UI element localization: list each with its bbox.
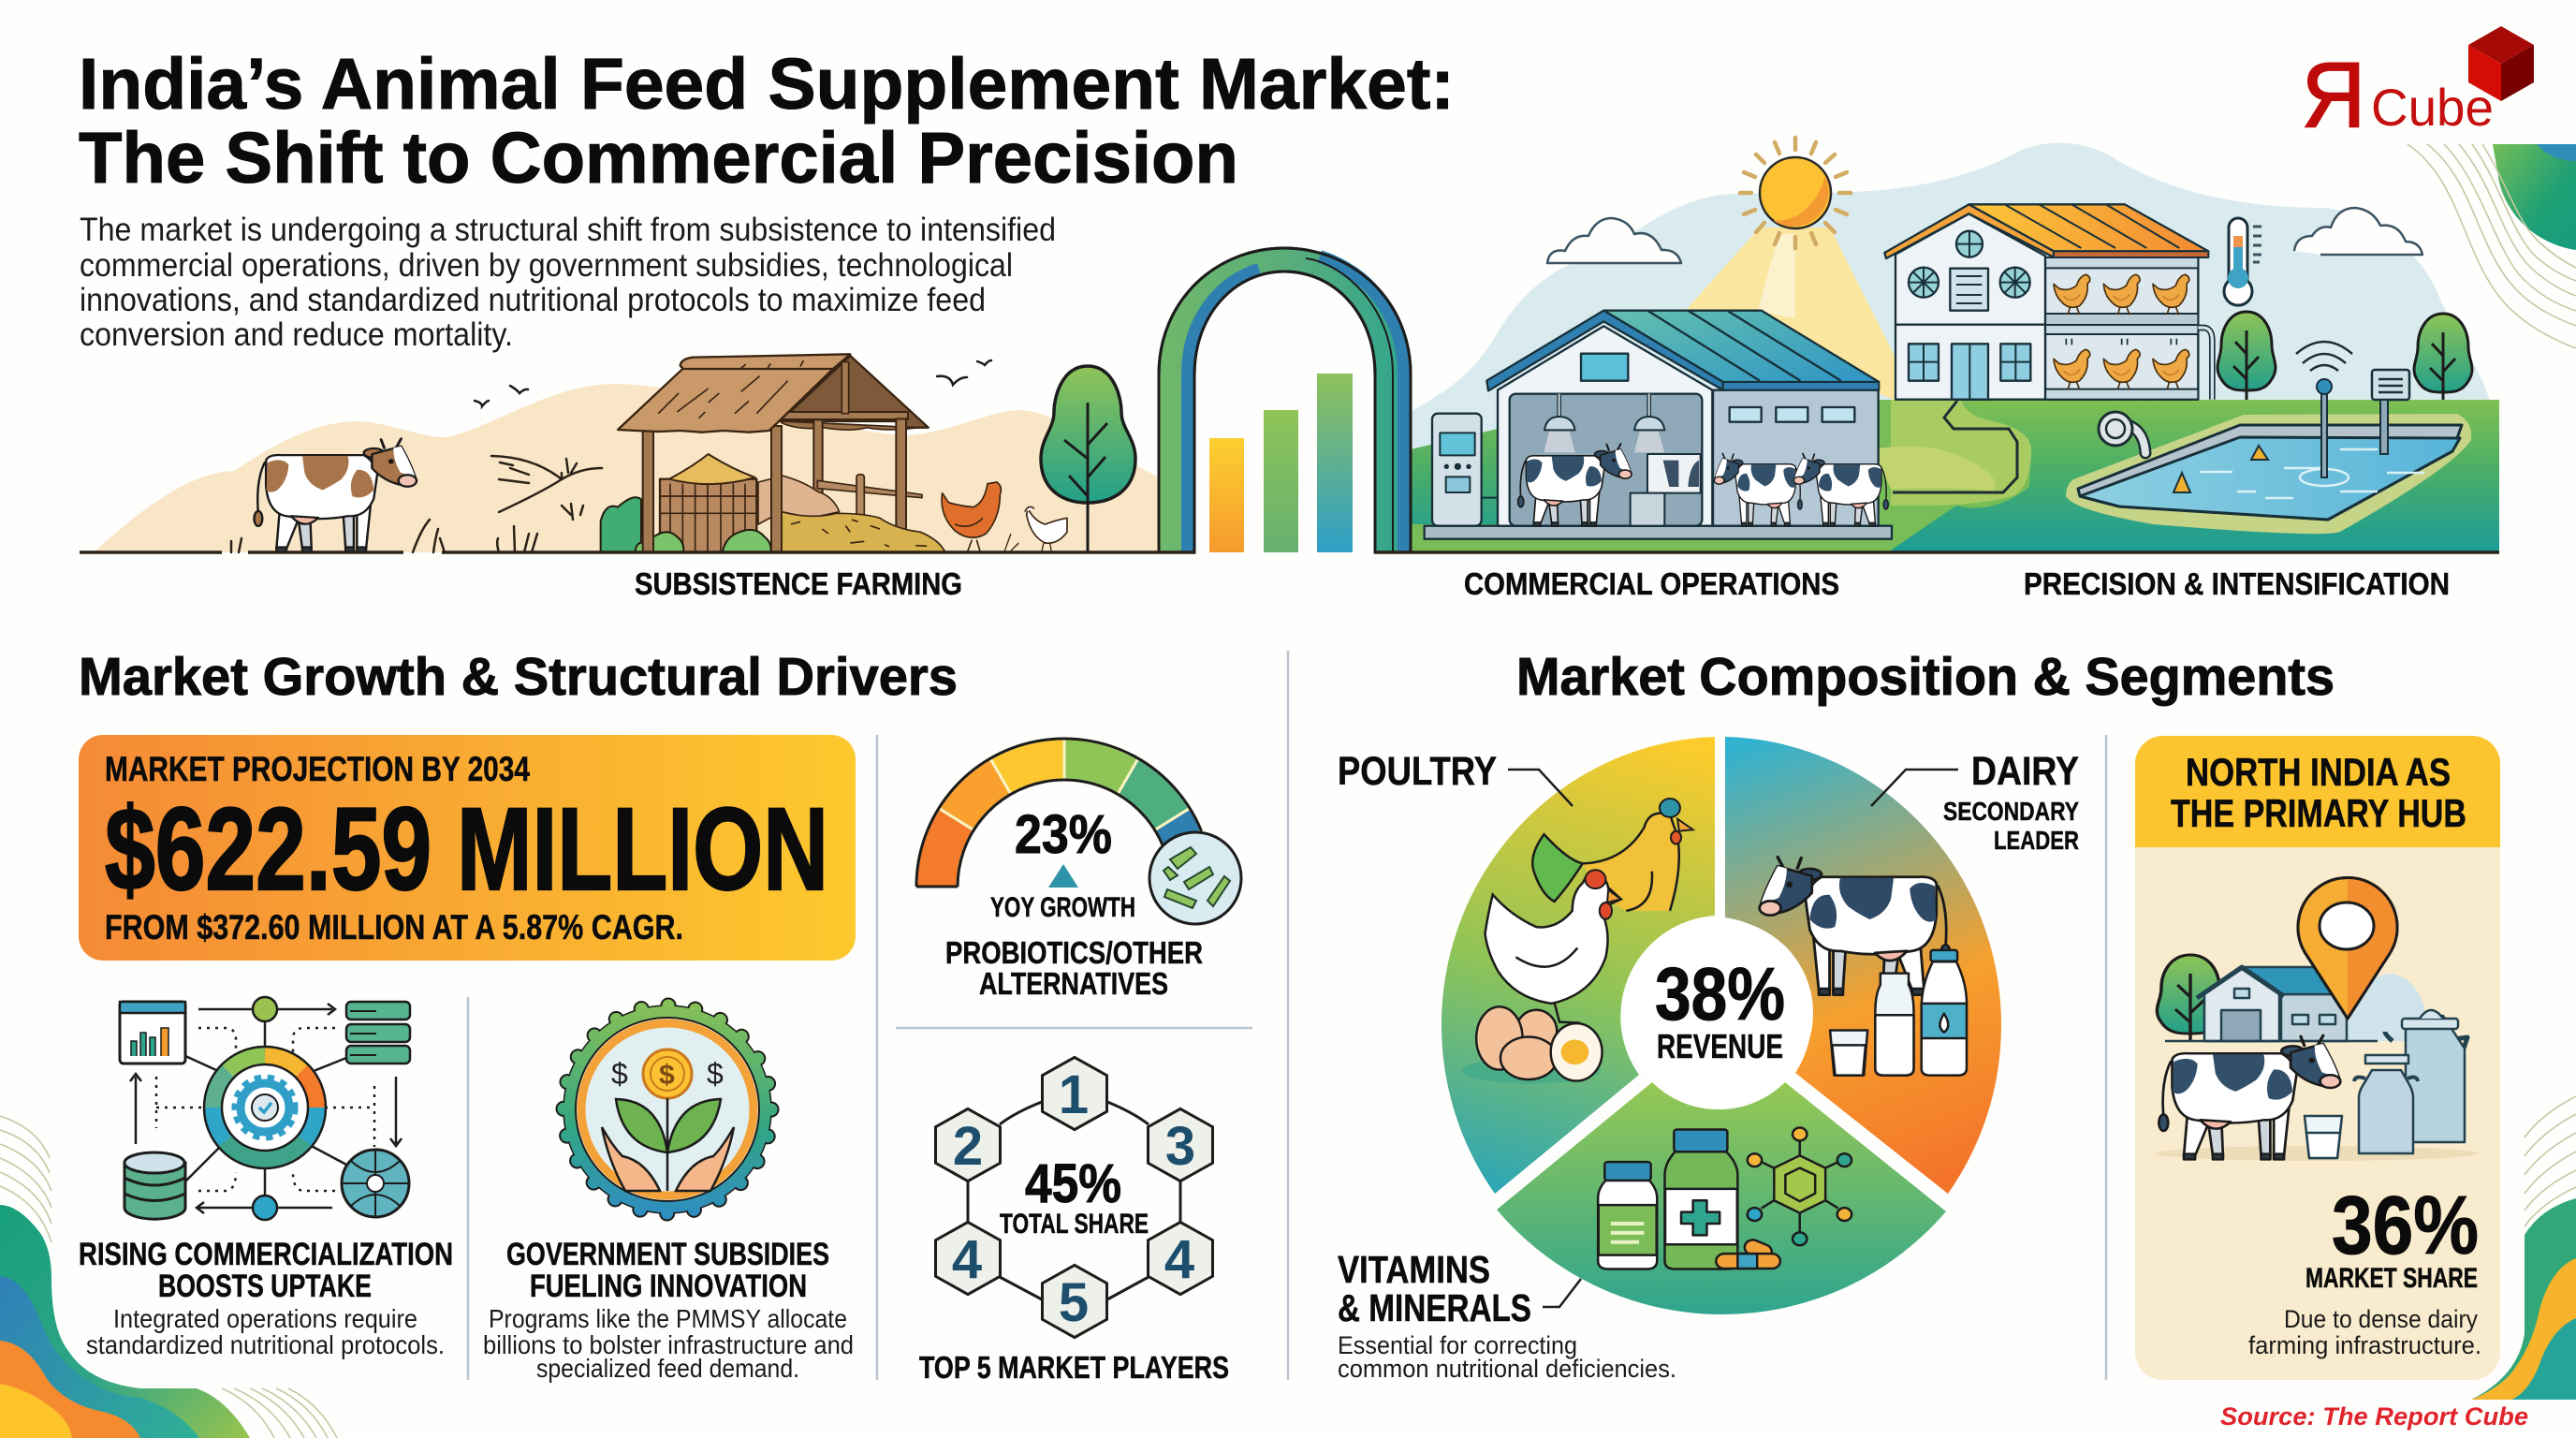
poultry house [1884, 204, 2212, 400]
gauge: probiotics growth: 23% [1015, 804, 1112, 865]
hexagon ring: top 5 market players [919, 1057, 1229, 1385]
title: The Shift to Commercial Precision [79, 118, 1238, 198]
icon: trees right [2217, 312, 2472, 400]
pond [2066, 414, 2471, 534]
label: dairy: LEADER [1994, 826, 2079, 855]
icon: government subsidy badge: $ [707, 1057, 724, 1091]
hero stage labels [635, 566, 2450, 601]
intro paragraph: commercial operations, driven by government subsidies, technological [80, 247, 1013, 284]
hexagon ring: top 5 market players: TOTAL SHARE [1000, 1209, 1149, 1240]
label: vitamins and minerals: common nutritional deficiencies. [1338, 1355, 1676, 1383]
label: vitamins and minerals: & MINERALS [1338, 1286, 1531, 1329]
decorative corner: bottom right [2471, 1096, 2576, 1400]
hexagon ring: top 5 market players: 4 [1164, 1229, 1194, 1290]
panel: north india hub: MARKET SHARE [2305, 1263, 2478, 1294]
brown cow [255, 439, 417, 552]
slice: dairy [1725, 737, 2001, 1194]
centre label: REVENUE [1657, 1027, 1783, 1065]
sensor mast and signal [2296, 342, 2409, 486]
label: poultry: POULTRY [1338, 749, 1497, 794]
holstein cows [1518, 444, 1888, 526]
label: dairy: DAIRY [1971, 749, 2079, 794]
gauge: probiotics growth [916, 739, 1241, 1001]
hexagon ring: top 5 market players: 4 [952, 1229, 982, 1290]
logo: RCube: Cube [2371, 78, 2494, 137]
label: poultry [1338, 749, 1573, 806]
sand hills background [94, 384, 1159, 552]
panel: north india hub: farming infrastructure. [2248, 1331, 2481, 1359]
hexagon ring: top 5 market players: 2 [953, 1116, 983, 1177]
hand-drawn hills and grass [231, 456, 602, 552]
hexagon ring: top 5 market players: 3 [1165, 1116, 1195, 1177]
yellow field patch and pipe [1872, 400, 2031, 506]
hero stage labels: SUBSISTENCE FARMING [635, 566, 962, 601]
icon: clouds [1547, 208, 2422, 263]
hexagon ring: top 5 market players: 1 [1059, 1064, 1089, 1125]
text: government subsidies: FUELING INNOVATION [530, 1269, 807, 1304]
gauge: probiotics growth: YOY GROWTH [990, 892, 1135, 923]
icon: microbes [1149, 832, 1241, 924]
panel: market projection: FROM $372.60 MILLION AT A 5.87% CAGR. [105, 908, 683, 946]
centre label: 38% [1655, 952, 1785, 1035]
text: government subsidies [483, 1237, 854, 1383]
arch [1159, 248, 1411, 552]
sky hill background [1411, 143, 2490, 552]
hub illustration [2156, 876, 2478, 1161]
thermometer [2224, 218, 2261, 305]
segmented pie chart [1442, 737, 2001, 1314]
thatched hut [601, 354, 1067, 552]
slice: vitamins and minerals [1497, 1082, 1946, 1314]
label: vitamins and minerals [1338, 1248, 1676, 1383]
panel: market projection: $622.59 MILLION [105, 785, 828, 915]
panel: north india hub: Due to dense dairy [2284, 1305, 2478, 1333]
ground line [80, 550, 2499, 554]
gauge: probiotics growth: PROBIOTICS/OTHER [945, 935, 1203, 970]
text: government subsidies: specialized feed demand. [536, 1354, 799, 1383]
heading: market composition: Market Composition & Segments [1516, 647, 2334, 707]
icon: government subsidy badge: $ [659, 1060, 675, 1091]
source note: Source: The Report Cube [2220, 1402, 2528, 1431]
birds [475, 360, 991, 406]
icon: sun [1740, 138, 1851, 248]
hexagon ring: top 5 market players: TOP 5 MARKET PLAYERS [919, 1350, 1229, 1385]
intro paragraph: innovations, and standardized nutritional protocols to maximize feed [80, 282, 986, 318]
text: rising commercialization: BOOSTS UPTAKE [158, 1269, 372, 1304]
intro paragraph: The market is undergoing a structural shift from subsistence to intensified [80, 212, 1056, 248]
text: rising commercialization: RISING COMMERCIALIZATION [79, 1237, 453, 1272]
label: dairy [1871, 749, 2079, 855]
text: rising commercialization: standardized nutritional protocols. [86, 1330, 445, 1359]
panel: north india hub: 36% [2332, 1179, 2479, 1271]
intro paragraph: conversion and reduce mortality. [80, 316, 513, 353]
hexagon ring: top 5 market players: 45% [1025, 1153, 1121, 1214]
decorative corner: top right [2408, 144, 2576, 348]
hero illustration: farming transition [80, 138, 2499, 552]
land [1411, 400, 2499, 552]
heading: market growth: Market Growth & Structural Drivers [79, 647, 958, 707]
hero stage labels: COMMERCIAL OPERATIONS [1464, 566, 1839, 601]
text: rising commercialization [79, 1237, 453, 1359]
panel: north india hub [2135, 736, 2500, 1380]
text: government subsidies: GOVERNMENT SUBSIDIES [506, 1237, 829, 1272]
panel: market projection: MARKET PROJECTION BY 2034 [105, 750, 530, 788]
icon: government subsidy badge [564, 1005, 771, 1213]
rising bars [1209, 374, 1353, 552]
logo: RCube [2302, 26, 2534, 146]
intro paragraph [80, 212, 1056, 353]
icon: government subsidy badge: $ [611, 1057, 628, 1091]
panel: north india hub: THE PRIMARY HUB [2171, 791, 2466, 835]
icon: tree subsistence [1041, 366, 1135, 552]
label: dairy: SECONDARY [1943, 797, 2079, 826]
sun beam [1687, 227, 1900, 403]
slice: poultry [1442, 737, 1715, 1194]
text: government subsidies: billions to bolster infrastructure and [483, 1330, 854, 1359]
hero stage labels: PRECISION & INTENSIFICATION [2024, 566, 2450, 601]
icon: integrated operations network [120, 997, 410, 1220]
label: vitamins and minerals: Essential for correcting [1338, 1331, 1577, 1359]
gauge: probiotics growth: ALTERNATIVES [979, 966, 1168, 1001]
dairy barn [1425, 311, 1892, 539]
label: vitamins and minerals: VITAMINS [1338, 1248, 1490, 1291]
title: India’s Animal Feed Supplement Market: [79, 44, 1455, 125]
logo: RCube: Я [2302, 43, 2365, 146]
panel: north india hub: NORTH INDIA AS [2186, 750, 2451, 794]
text: rising commercialization: Integrated operations require [113, 1304, 417, 1333]
text: government subsidies: Programs like the PMMSY allocate [489, 1304, 847, 1333]
faucet [2099, 412, 2145, 453]
hexagon ring: top 5 market players: 5 [1059, 1272, 1089, 1333]
title [79, 44, 1455, 198]
centre label [1626, 919, 1813, 1107]
decorative corner: bottom left [0, 1116, 337, 1438]
panel: market projection [79, 735, 856, 961]
